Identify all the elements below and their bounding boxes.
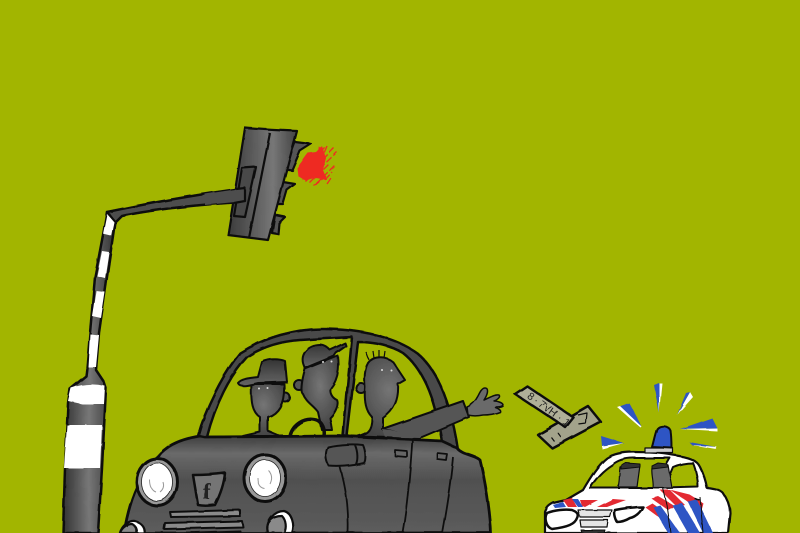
car [120, 329, 503, 533]
plate: upper: 8 · 7VH · 1 [524, 390, 572, 429]
licence plates [515, 386, 601, 448]
police headlights [546, 507, 643, 529]
police door line [663, 488, 703, 533]
car body [124, 436, 491, 533]
badge: f [203, 479, 211, 504]
door handles [395, 450, 447, 460]
steering wheel [290, 419, 324, 436]
occupant: left, cap [238, 359, 290, 436]
police body [545, 452, 730, 533]
light glow: red splatter [297, 146, 337, 186]
headlight left [136, 458, 178, 506]
traffic light [205, 128, 337, 240]
pole mast [63, 212, 115, 533]
mast stripes [64, 214, 114, 468]
badge [193, 473, 225, 506]
occupant: passenger [356, 350, 503, 438]
police blue stripes [553, 499, 713, 533]
door lines [340, 438, 453, 533]
housing [228, 128, 297, 240]
headlight right [244, 454, 286, 502]
waving arm [382, 401, 469, 437]
hoods [285, 142, 311, 170]
traffic light pole [63, 188, 246, 533]
police officers [618, 465, 672, 488]
police car [545, 383, 730, 533]
fog lights [120, 511, 293, 533]
occupant: driver [290, 343, 346, 436]
police red stripes [563, 490, 703, 518]
grille [164, 510, 243, 533]
pole arm [107, 188, 246, 223]
car roof [198, 329, 458, 450]
police windows [590, 458, 670, 488]
plate: lower [538, 406, 601, 448]
siren rays [601, 383, 717, 449]
siren [645, 426, 673, 453]
police grille [578, 510, 612, 527]
mirror [326, 444, 365, 466]
